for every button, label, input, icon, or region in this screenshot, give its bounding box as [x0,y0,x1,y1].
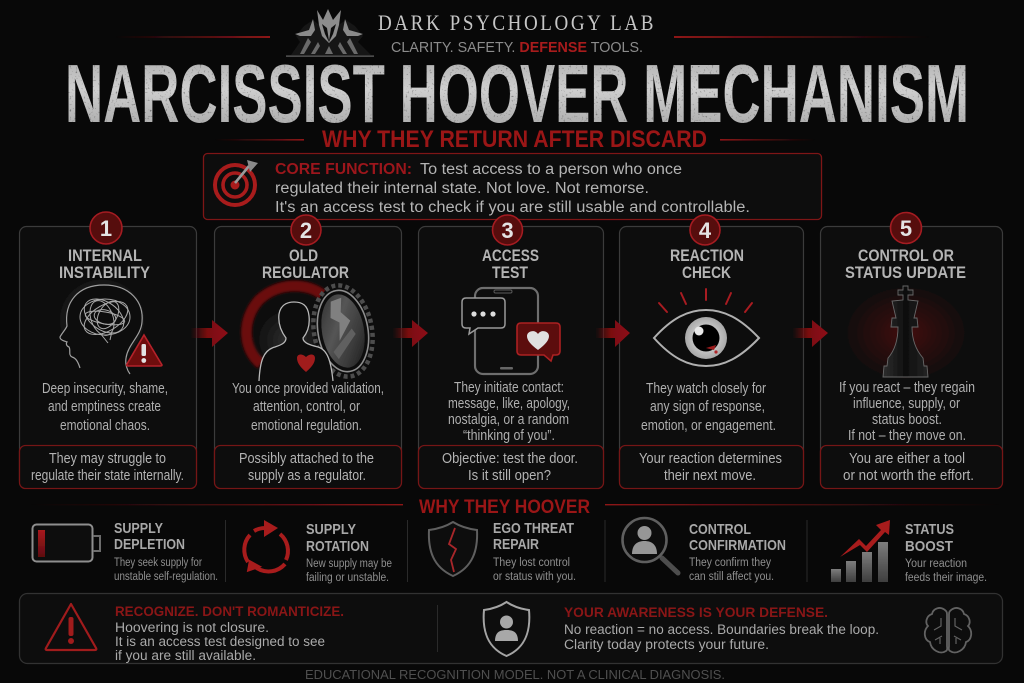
takeaway 5 [820,446,1002,488]
heading 5 [845,247,966,282]
tagline: CLARITY. SAFETY. DEFENSE TOOLS. [391,39,643,56]
body text 3: They initiate contact: [454,379,564,396]
footer disclaimer: EDUCATIONAL RECOGNITION MODEL. NOT A CLINICAL DIAGNOSIS. [305,668,725,682]
reason: supply rotation: New supply may be [306,558,392,570]
reason: ego threat repair: EGO THREAT [493,520,574,537]
body text 1: Deep insecurity, shame, [42,380,168,397]
reason: supply depletion: SUPPLY [114,520,163,537]
step number 1 [90,212,122,244]
arrow 1 to 2 [190,320,228,347]
body text 2: emotional regulation. [251,417,362,434]
heading 3: TEST [492,264,528,282]
callout: recognize: if you are still available. [115,648,256,663]
body text 4: any sign of response, [650,398,765,415]
reason: control confirmation [622,518,786,583]
heading 2: REGULATOR [262,264,349,282]
heading 4: CHECK [682,264,731,282]
takeaway 3: Objective: test the door. [442,450,578,467]
reason: status boost: BOOST [905,538,953,555]
arrow 2 to 3 [392,320,428,347]
panel: core function [204,154,822,220]
step number 2: 2 [300,218,312,243]
reason: ego threat repair [429,520,576,583]
callout: recognize: RECOGNIZE. DON'T ROMANTICIZE. [115,603,344,619]
arrow 3 to 4 [595,320,630,347]
panel: bottom callouts [20,594,1002,664]
icon: watching eye [654,289,759,366]
icon: rotation arrows [244,520,288,572]
reason: ego threat repair: They lost control [493,557,570,569]
panel: step 3 access test [418,215,604,488]
step number 5 [890,212,922,244]
body text 5: influence, supply, or [853,395,960,412]
body text 1: emotional chaos. [60,417,150,434]
icon: head with tangled mind and warning [50,270,162,374]
reason: control confirmation: CONTROL [689,521,751,538]
icon: magnifier with person [622,518,678,573]
step number 2 [291,215,321,245]
step number 3: 3 [501,218,514,243]
reason: supply depletion [32,520,218,583]
callout: recognize [115,603,344,663]
body text 4: emotion, or engagement. [641,417,776,434]
step number 5: 5 [900,216,912,241]
body text 3 [448,379,570,444]
takeaway 1 [20,446,196,488]
icon: warning triangle [46,604,96,650]
heading 4: REACTION [670,247,744,265]
takeaway 2 [214,446,402,488]
takeaway 2: Possibly attached to the [239,450,374,467]
body text 5: If you react – they regain [839,379,975,396]
reason: supply rotation: SUPPLY [306,521,356,538]
takeaway 5: or not worth the effort. [843,467,974,484]
takeaway 1: regulate their state internally. [31,467,184,484]
callout: recognize: Hoovering is not closure. [115,620,269,635]
reason: status boost: Your reaction [905,558,967,570]
body text 5: status boost. [872,411,942,428]
body text 2: attention, control, or [253,398,360,415]
reason: status boost: STATUS [905,521,954,538]
core function text: regulated their internal state. Not love. Not remorse. [275,180,649,197]
reason: ego threat repair: REPAIR [493,536,539,553]
reason: status boost [831,520,987,584]
takeaway 3 [418,446,604,488]
body text 3: message, like, apology, [448,395,570,412]
reason: control confirmation: can still affect you. [689,571,774,583]
body text 2 [232,380,384,434]
icon: target with arrow [215,160,258,205]
icon: chess king on red glow [836,279,976,387]
reason: control confirmation: CONFIRMATION [689,537,786,554]
body text 1 [42,380,168,434]
reason: status boost: feeds their image. [905,572,987,584]
reason: ego threat repair: or status with you. [493,571,576,583]
reason: supply depletion: They seek supply for [114,557,202,569]
heading 2: OLD [289,247,318,265]
icon: silhouette with mirror [246,281,380,381]
icon: brain [925,608,971,652]
callout: awareness: No reaction = no access. Boundaries break the loop. [564,622,879,637]
callout: awareness [564,604,879,652]
core function text [275,161,750,216]
takeaway 2: supply as a regulator. [248,467,366,484]
takeaway 1: They may struggle to [49,450,166,467]
reason: supply depletion: DEPLETION [114,536,185,553]
takeaway 4: Your reaction determines [639,450,782,467]
step number 4: 4 [699,218,712,243]
takeaway 3: Is it still open? [468,467,551,484]
takeaway 4 [620,446,804,488]
body text 3: nostalgia, or a random [448,411,569,428]
callout: recognize: It is an access test designed to see [115,634,325,649]
reason: control confirmation: They confirm they [689,557,771,569]
heading 1: INTERNAL [68,247,142,265]
core function text: CORE FUNCTION: [275,161,412,178]
heading 1: INSTABILITY [59,264,150,282]
brand name: DARK PSYCHOLOGY LAB [378,10,656,35]
heading 4 [670,247,744,282]
reason: supply rotation: failing or unstable. [306,572,389,584]
panel: step 2 old regulator [214,215,402,488]
icon: low battery [32,524,100,562]
heading 2 [262,247,349,282]
heading 1 [59,247,150,282]
heading 3: ACCESS [482,247,539,265]
body text 5: If not – they move on. [848,427,966,444]
body text 4 [641,380,776,434]
heading 5: STATUS UPDATE [845,264,966,282]
panel: step 4 reaction check [620,215,804,488]
body text 5 [839,379,975,444]
icon: phone with chat bubbles [462,288,560,374]
step number 3 [492,215,522,245]
icon: rising bars and arrow [831,520,890,582]
subtitle: WHY THEY RETURN AFTER DISCARD [322,126,707,153]
reason: supply rotation [244,520,392,584]
step number 4 [690,215,720,245]
body text 4: They watch closely for [646,380,766,397]
header: brand block [115,9,930,57]
reason: supply depletion: unstable self-regulation. [114,571,218,583]
icon: wolf pack logo [286,9,374,57]
heading 5: CONTROL OR [858,247,954,265]
body text 2: You once provided validation, [232,380,384,397]
panel: step 1 internal instability [20,212,196,488]
core function text: To test access to a person who once [420,161,682,178]
icon: shield with person [484,602,529,656]
body text 1: and emptiness create [48,398,161,415]
callout: awareness: Clarity today protects your future. [564,637,769,652]
step number 1: 1 [100,216,112,241]
body text 3: “thinking of you”. [463,427,555,444]
takeaway 5: You are either a tool [849,450,965,467]
callout: awareness: YOUR AWARENESS IS YOUR DEFENSE. [564,604,828,620]
section heading: why they hoover: WHY THEY HOOVER [419,496,590,518]
core function text: It's an access test to check if you are still usable and controllable. [275,199,750,216]
reason: supply rotation: ROTATION [306,538,369,555]
heading 3 [482,247,539,282]
arrow 4 to 5 [792,320,828,347]
icon: cracked shield [429,522,477,576]
takeaway 4: their next move. [664,467,756,484]
panel: step 5 control or status update [820,212,1002,488]
